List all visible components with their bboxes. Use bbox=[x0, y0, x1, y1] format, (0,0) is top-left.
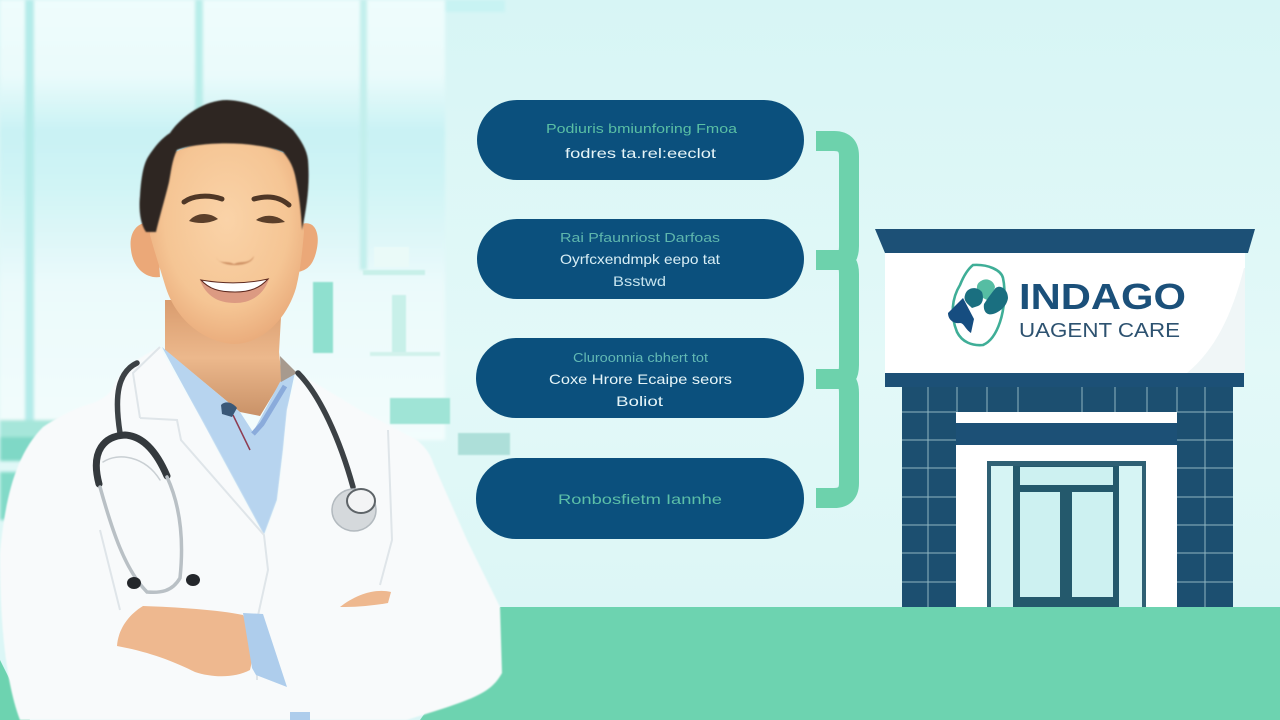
pill 2: Bsstwd bbox=[613, 273, 666, 289]
smile bbox=[200, 279, 269, 303]
shirt cuff bbox=[243, 613, 287, 687]
neck bbox=[165, 300, 282, 416]
eyebrows bbox=[184, 196, 289, 205]
pill 3: Cluroonnia cbhert tot bbox=[573, 350, 708, 365]
sign subtitle: UAGENT CARE bbox=[1019, 320, 1180, 342]
pill 4 bbox=[476, 458, 804, 539]
sign panel bbox=[885, 253, 1245, 373]
lab coat bbox=[0, 347, 502, 720]
face bbox=[150, 130, 304, 344]
entrance canopy bbox=[956, 423, 1177, 445]
ears bbox=[131, 222, 318, 277]
pill 3: Boliot bbox=[616, 393, 663, 409]
entrance surround bbox=[956, 412, 1177, 607]
eyes bbox=[189, 214, 285, 223]
fascia band bbox=[885, 373, 1244, 387]
pill 2: Rai Pfaunriost Darfoas bbox=[560, 230, 721, 245]
bracket connector bbox=[816, 141, 849, 498]
tiled wall bbox=[902, 387, 1233, 607]
pill 1: Podiuris bmiunforing Fmoa bbox=[546, 121, 738, 136]
stethoscope chest piece bbox=[332, 489, 376, 531]
stethoscope ear tips bbox=[127, 574, 200, 589]
shirt bbox=[162, 347, 295, 535]
ground band bbox=[420, 607, 1280, 720]
sign name: INDAGO bbox=[1019, 276, 1186, 317]
pill 3: Coxe Hrore Ecaipe seors bbox=[549, 371, 732, 387]
stethoscope bbox=[96, 363, 353, 592]
pill 4: Ronbosfietm Iannhe bbox=[558, 491, 722, 507]
logo bbox=[948, 265, 1008, 345]
coat shadows and seams bbox=[100, 347, 392, 680]
doors bbox=[987, 461, 1146, 607]
pill 1 bbox=[477, 100, 804, 180]
roof bbox=[875, 229, 1255, 253]
collar details bbox=[221, 356, 297, 450]
building: Indago Urgent Care bbox=[875, 229, 1255, 607]
pill 2 bbox=[477, 219, 804, 299]
nose bbox=[216, 256, 254, 265]
pill 2: Oyrfcxendmpk eepo tat bbox=[560, 251, 720, 267]
left ground behind doctor bbox=[0, 660, 30, 720]
pill 3 bbox=[476, 338, 804, 418]
hair bbox=[140, 100, 309, 232]
hand and forearm bbox=[117, 606, 252, 676]
doctor portrait bbox=[0, 100, 502, 720]
panel: option pills bbox=[476, 100, 804, 539]
pill 1: fodres ta.rel:eeclot bbox=[565, 145, 716, 161]
